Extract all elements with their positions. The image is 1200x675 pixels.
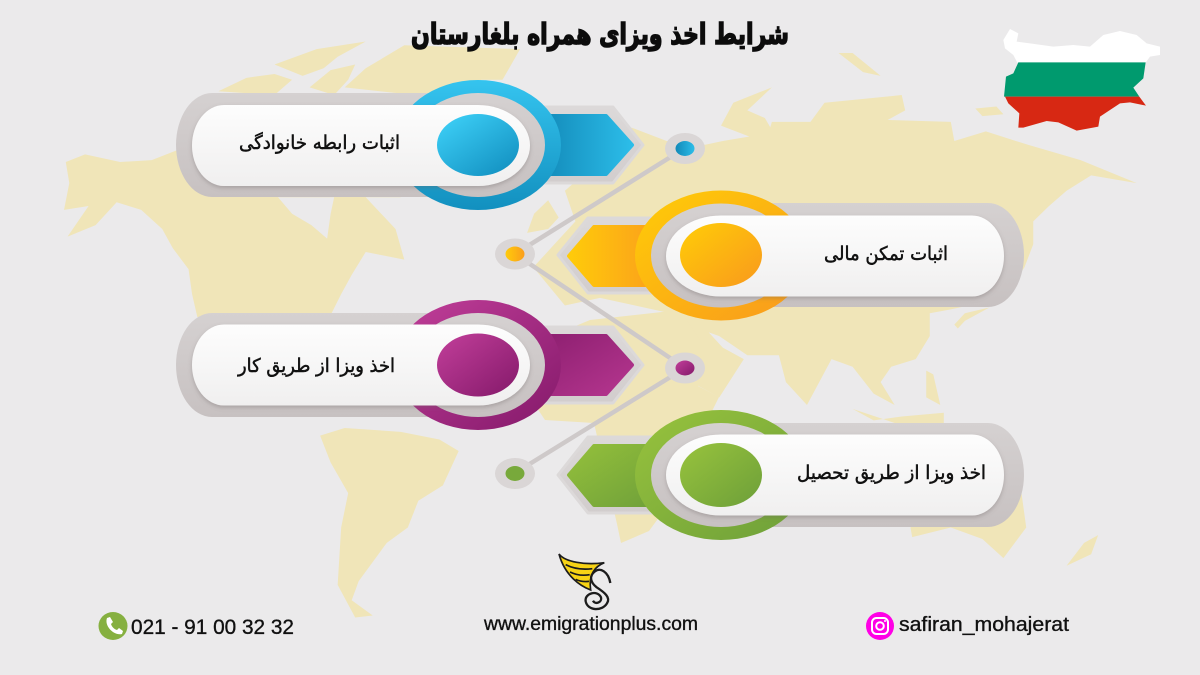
arrow tag: blue: [540, 116, 632, 174]
title: شرایط اخذ ویزای همراه بلغارستان: [411, 17, 789, 51]
website: www.emigrationplus.com: [483, 614, 698, 635]
label: اخذ ویزا از طریق تحصیل: [797, 462, 986, 484]
phone number: 021 - 91 00 32 32: [131, 616, 294, 639]
connector lines: [515, 148, 685, 473]
node: yellow: [495, 238, 535, 270]
label: اثبات تمکن مالی: [824, 243, 948, 265]
logo: [559, 554, 610, 609]
arrow tag: purple: [540, 336, 632, 394]
panel: financial ability: [558, 190, 1024, 320]
icon: instagram: [866, 612, 894, 640]
label: اخذ ویزا از طریق کار: [237, 355, 395, 377]
instagram handle: safiran_mohajerat: [899, 614, 1069, 636]
label: اثبات رابطه خانوادگی: [239, 131, 400, 154]
panel: study visa: [558, 410, 1024, 540]
arrow tag: yellow: [569, 227, 660, 285]
icon: phone: [98, 612, 128, 640]
arrow tag: green: [569, 446, 660, 505]
panel: work visa: [176, 300, 643, 430]
icon: Bulgaria flag map: [1003, 29, 1160, 131]
node: blue: [665, 133, 705, 164]
panel: family relationship: [176, 80, 643, 210]
node: purple: [665, 352, 705, 384]
world map: [64, 41, 1137, 617]
node: green: [495, 458, 535, 489]
